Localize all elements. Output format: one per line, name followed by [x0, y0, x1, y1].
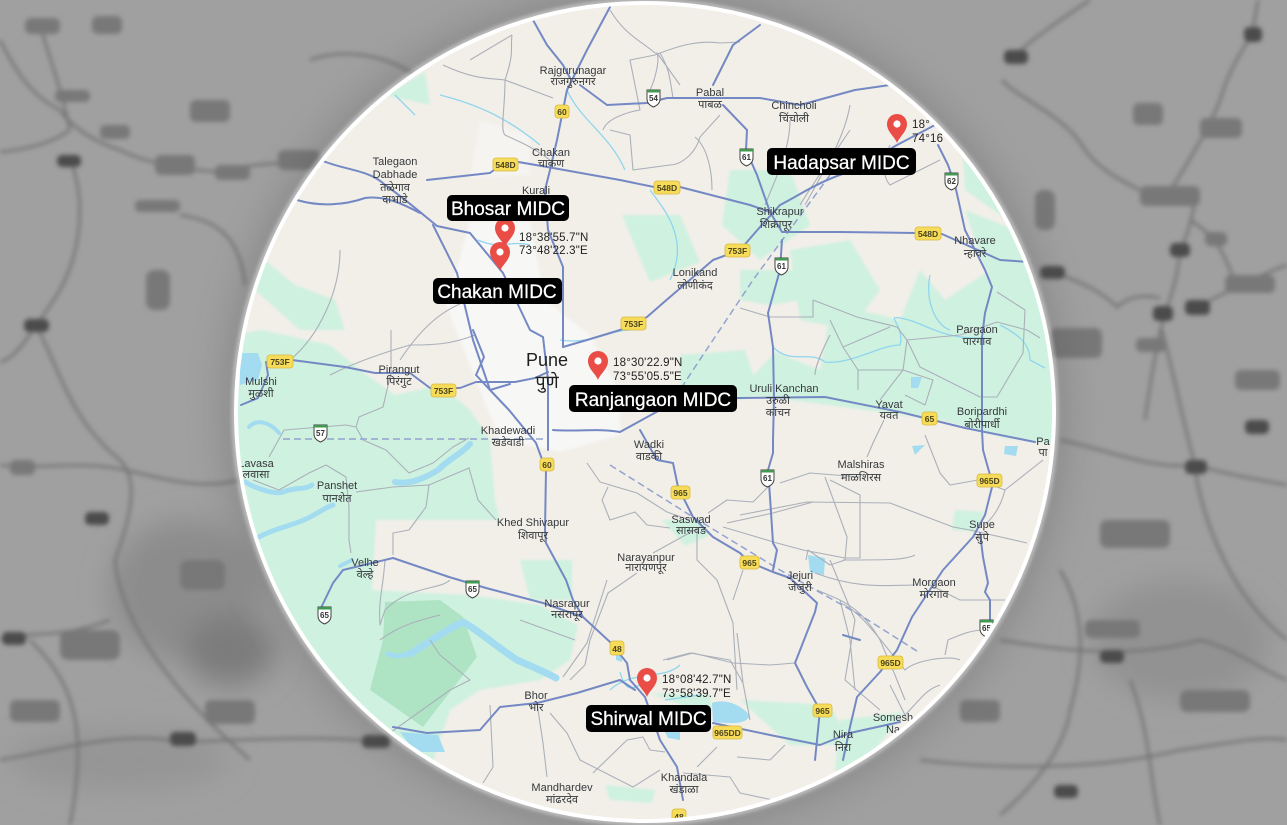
rivers — [395, 90, 1045, 700]
town labels: मांढरदेव — [546, 793, 579, 806]
label: Shirwal MIDC: Shirwal MIDC — [590, 709, 707, 730]
town labels: Talegaon — [373, 156, 417, 168]
town labels: Somesh — [873, 712, 913, 724]
town labels: Nhavare — [954, 235, 996, 247]
marker: Shirwal: 73°58'39.7"E — [662, 688, 731, 700]
highway shields: 753F — [728, 246, 747, 256]
town labels: खडेवाडी — [492, 436, 524, 449]
town labels: पा — [1038, 447, 1048, 459]
town labels: Yavat — [875, 399, 903, 411]
map base — [230, 0, 1060, 825]
town labels: Narayanpur — [617, 552, 675, 564]
town labels: लोणीकंद — [677, 279, 713, 292]
town labels: भोर — [528, 701, 544, 714]
town labels: पुणे — [535, 371, 560, 393]
town labels: Shikrapur — [756, 206, 804, 218]
town labels: Lavasa — [238, 458, 275, 470]
highway shields: 965DD — [714, 728, 741, 738]
town labels: दाभाडे — [382, 193, 408, 206]
highway shields: 48 — [674, 812, 684, 822]
town labels: शिक्रापूर — [760, 218, 793, 232]
highway shields: 48 — [612, 644, 622, 654]
town labels: पाबळ — [698, 99, 723, 111]
town labels: Pune — [526, 350, 568, 370]
town labels: कांचन — [766, 406, 791, 419]
marker: Shirwal — [637, 668, 732, 700]
town labels: लवासा — [243, 469, 269, 481]
town labels: Pirangut — [379, 364, 419, 376]
railway lines — [283, 175, 920, 653]
town labels: मोरगाव — [919, 588, 949, 601]
highway shields: 60 — [542, 460, 552, 470]
town labels: Uruli Kanchan — [749, 383, 819, 395]
marker: Hadapsar — [887, 114, 943, 145]
town labels: Supe — [969, 519, 995, 531]
town labels: नारायणपूर — [625, 562, 667, 575]
marker: Bhosar: 73°48'22.3"E — [519, 245, 588, 257]
label: Hadapsar MIDC: Hadapsar MIDC — [773, 153, 910, 174]
map: circular Google Maps view — [230, 0, 1060, 825]
urban area — [446, 120, 620, 452]
town labels: Na — [886, 724, 901, 736]
town labels: Khadewadi — [481, 425, 535, 437]
highway shields: 61 — [763, 474, 772, 483]
town labels: माळशिरस — [841, 471, 882, 484]
highway shields: 60 — [557, 107, 567, 117]
town labels: वाडकी — [636, 450, 662, 463]
highway shields: 965 — [742, 558, 757, 568]
town labels: वेल्हे — [357, 568, 374, 581]
label: Bhosar MIDC: Bhosar MIDC — [451, 199, 565, 220]
town labels: राजगुरुनगर — [550, 76, 596, 88]
town labels: Velhe — [351, 557, 379, 569]
marker: Shirwal: 18°08'42.7"N — [662, 674, 732, 686]
town labels: Mandhardev — [531, 782, 593, 794]
town labels: शिवापूर — [518, 529, 549, 543]
label: Ranjangaon MIDC: Ranjangaon MIDC — [575, 390, 731, 411]
marker: Chakan — [490, 242, 510, 271]
label: Chakan MIDC: Chakan MIDC — [437, 282, 557, 303]
marker: Ranjangaon: 73°55'05.5"E — [613, 371, 682, 383]
town labels: सुपे — [975, 531, 990, 544]
highway shields: 65 — [468, 585, 477, 594]
town labels: Pargaon — [956, 324, 998, 336]
marker: Ranjangaon: 18°30'22.9"N — [613, 357, 683, 369]
highway shields: 65 — [982, 624, 991, 633]
highway shields: 548D — [657, 183, 677, 193]
marker: Hadapsar: 18° — [912, 119, 930, 131]
town labels: Mulshi — [245, 376, 277, 388]
highway shields: 57 — [316, 429, 325, 438]
highway shields: 965 — [673, 488, 688, 498]
town labels: Lonikand — [673, 267, 717, 279]
highway shields: 548D — [918, 229, 938, 239]
highway shields: 753F — [270, 357, 290, 367]
town labels: Boripardhi — [957, 406, 1007, 418]
town labels: Nira — [833, 729, 854, 741]
town labels: पानशेत — [323, 492, 352, 505]
town labels: Pa — [1036, 436, 1051, 448]
highway shields: 965D — [880, 658, 901, 668]
town labels: Dabhade — [373, 169, 417, 181]
town labels: Panshet — [317, 480, 357, 492]
town labels: Chincholi — [771, 100, 817, 112]
town labels: Jejuri — [787, 570, 813, 582]
highway shields: 65 — [320, 611, 329, 620]
highway shields: 61 — [777, 262, 786, 271]
marker: Bhosar — [495, 218, 589, 257]
highway shields: 65 — [925, 414, 934, 424]
major roads — [241, 7, 1035, 800]
town labels — [238, 65, 1051, 806]
highway shields: 62 — [947, 177, 956, 186]
town labels: Pabal — [696, 87, 724, 99]
town labels: Nasrapur — [544, 598, 590, 610]
minor roads — [253, 10, 1043, 800]
circle border — [236, 3, 1054, 821]
green areas — [230, 72, 1060, 803]
town labels: जेजुरी — [788, 581, 812, 594]
town labels: Morgaon — [912, 577, 956, 589]
town labels: पिरंगुट — [386, 375, 412, 388]
town labels: बोरीपार्धी — [964, 418, 1001, 431]
town labels: Bhor — [524, 690, 548, 702]
circle shadow — [225, 0, 1065, 825]
town labels: Malshiras — [837, 459, 885, 471]
highway shields — [267, 90, 1002, 823]
town labels: पारगाव — [963, 336, 992, 348]
town labels: सासवड — [676, 525, 706, 537]
town labels: न्हावरे — [964, 247, 987, 260]
highway shields: 548D — [495, 160, 516, 170]
town labels: नसरापूर — [551, 609, 583, 622]
town labels: चाकण — [538, 158, 565, 170]
town labels: Khandala — [661, 772, 708, 784]
town labels: खंडाळा — [670, 783, 699, 796]
marker: Ranjangaon — [588, 351, 683, 383]
marker: Hadapsar: 74°16 — [912, 133, 943, 145]
town labels: चिंचोली — [779, 112, 809, 125]
water — [240, 353, 1018, 752]
highway shields: 753F — [434, 386, 453, 396]
town labels: यवत — [880, 410, 899, 422]
town labels: Wadki — [634, 439, 664, 451]
highway shields: 965D — [979, 476, 1000, 486]
town labels: उरुळी — [766, 394, 790, 407]
town labels: Chakan — [532, 147, 570, 159]
highway shields: 753F — [624, 319, 643, 329]
town labels: Kurali — [522, 185, 550, 197]
circle white glow — [234, 1, 1056, 823]
town labels: निरा — [835, 741, 851, 754]
forest area — [370, 600, 477, 727]
town labels: Saswad — [671, 514, 711, 526]
town labels: Khed Shivapur — [497, 517, 569, 529]
town labels: मुळशी — [248, 387, 274, 400]
highway shields: 965 — [815, 706, 830, 716]
highway shields: 61 — [742, 153, 751, 162]
town labels: Rajgurunagar — [540, 65, 607, 77]
town labels: तळेगाव — [380, 181, 411, 194]
marker: Bhosar: 18°38'55.7"N — [519, 232, 589, 244]
highway shields: 54 — [649, 94, 658, 103]
